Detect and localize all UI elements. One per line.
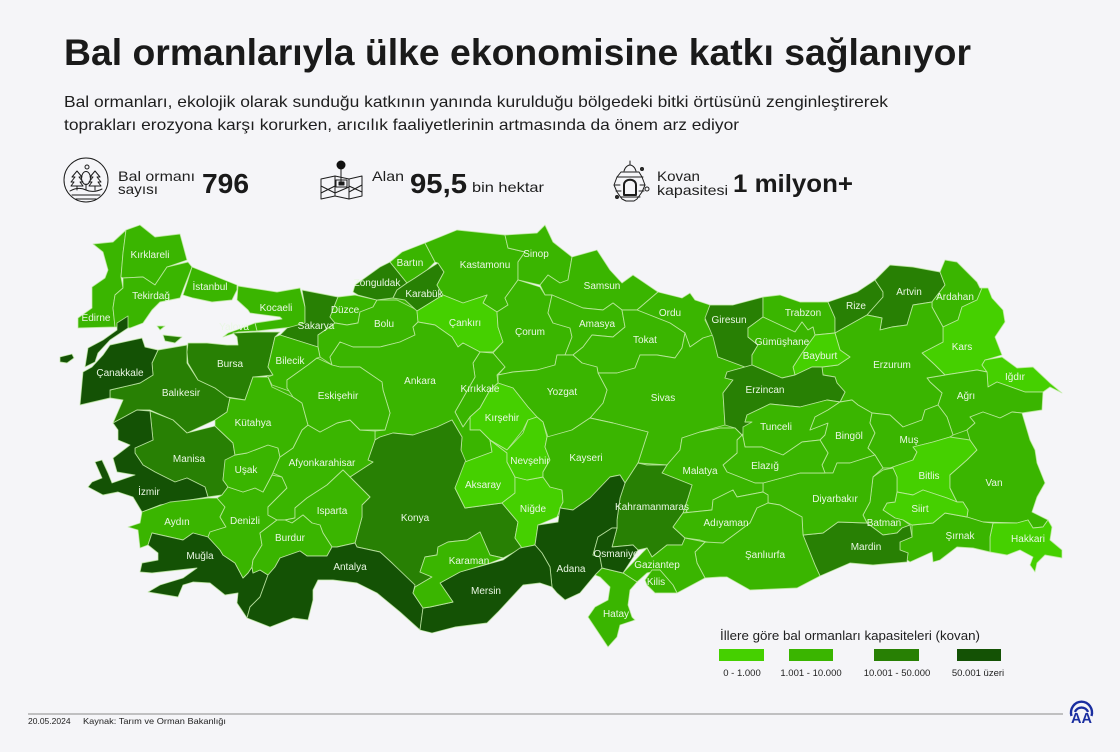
legend: 50.001 üzeri: [952, 668, 1004, 679]
province name labels: Erzurum: [873, 360, 911, 371]
province name labels: Tekirdağ: [132, 291, 170, 302]
subtitle text: [64, 94, 889, 134]
stat: hive capacity: 1 milyon+: [733, 170, 853, 198]
province name labels: Amasya: [579, 319, 615, 330]
subtitle text: Bal ormanları, ekolojik olarak sunduğu katkının yanında kurulduğu bölgedeki bitki örtüsünü zenginleştirerek: [64, 94, 889, 111]
province name labels: Diyarbakır: [812, 494, 858, 505]
province name labels: Edirne: [82, 313, 111, 324]
province shapes: [60, 225, 1062, 647]
stat: hive capacity: [614, 161, 853, 201]
province name labels: Şanlıurfa: [745, 550, 785, 561]
province name labels: Denizli: [230, 516, 260, 527]
province name labels: Karaman: [449, 556, 489, 567]
province name labels: Sinop: [523, 249, 549, 260]
province name labels: Mersin: [471, 586, 501, 597]
province name labels: Adana: [557, 564, 586, 575]
province name labels: Niğde: [520, 504, 546, 515]
province name labels: Bitlis: [918, 471, 940, 482]
province name labels: Düzce: [331, 305, 360, 316]
province name labels: Kırklareli: [131, 250, 169, 261]
province name labels: Bingöl: [835, 431, 863, 442]
province name labels: Tokat: [633, 335, 657, 346]
stat: hive capacity: Kovan: [657, 168, 700, 184]
province name labels: Samsun: [584, 281, 620, 292]
province name labels: Ankara: [404, 376, 436, 387]
province name labels: Iğdır: [1005, 372, 1026, 383]
province name labels: Kırıkkale: [461, 384, 500, 395]
legend: [719, 629, 1004, 679]
province name labels: Hatay: [603, 609, 629, 620]
province name labels: Elazığ: [751, 461, 779, 472]
province name labels: Karabük: [405, 289, 444, 300]
province name labels: Yalova: [219, 322, 249, 333]
province name labels: Giresun: [711, 315, 747, 326]
province name labels: Kayseri: [569, 453, 603, 464]
stat: area: [321, 160, 544, 199]
stat: forest count: [64, 158, 249, 202]
province name labels: Bartın: [397, 258, 423, 269]
province name labels: Afyonkarahisar: [289, 458, 356, 469]
province name labels: Kilis: [647, 577, 665, 588]
province name labels: Manisa: [173, 454, 206, 465]
subtitle text: toprakları erozyona karşı korurken, arıcılık faaliyetlerinin artmasında da önem arz ediyor: [64, 117, 740, 134]
legend: 0 - 1.000: [723, 668, 761, 679]
province name labels: Tunceli: [760, 422, 792, 433]
province name labels: Hakkari: [1011, 534, 1045, 545]
province name labels: Gaziantep: [634, 560, 680, 571]
province name labels: Aydın: [164, 517, 190, 528]
province name labels: Sivas: [651, 393, 675, 404]
province name labels: Konya: [401, 513, 430, 524]
province name labels: İstanbul: [192, 280, 228, 293]
icon: map with pin: [321, 160, 362, 199]
footer source line: 20.05.2024: [28, 716, 71, 726]
legend: 10.001 - 50.000: [864, 668, 930, 679]
province name labels: Bayburt: [803, 351, 837, 362]
icon: forest: [64, 158, 108, 202]
legend: İllere göre bal ormanları kapasiteleri (kovan): [720, 629, 980, 643]
province name labels: Ağrı: [957, 391, 975, 402]
province name labels: Yozgat: [547, 387, 577, 398]
province name labels: Malatya: [682, 466, 718, 477]
province name labels: Muş: [900, 435, 918, 446]
province name labels: Isparta: [317, 506, 348, 517]
province name labels: Mardin: [851, 542, 881, 553]
province name labels: Şırnak: [946, 531, 975, 542]
province name labels: Bilecik: [276, 356, 305, 367]
province name labels: Kütahya: [235, 418, 272, 429]
province name labels: Kastamonu: [460, 260, 510, 271]
province name labels: Çorum: [515, 327, 545, 338]
province name labels: Muğla: [186, 551, 214, 562]
stat: hive capacity: kapasitesi: [657, 182, 728, 198]
choropleth map of Turkey: [60, 225, 1062, 647]
province name labels: Van: [985, 478, 1003, 489]
stat: forest count: sayısı: [118, 181, 158, 197]
province name labels: Çanakkale: [96, 368, 144, 379]
province name labels: Osmaniye: [593, 549, 639, 560]
icon: beehive: [614, 161, 649, 201]
province name labels: Batman: [867, 518, 901, 529]
province name labels: Bursa: [217, 359, 243, 370]
stat: area: Alan: [372, 168, 404, 184]
province name labels: Aksaray: [465, 480, 501, 491]
province name labels: Adıyaman: [703, 518, 749, 529]
province name labels: Balıkesir: [162, 388, 201, 399]
legend: 1.001 - 10.000: [780, 668, 842, 679]
province name labels: Kahramanmaraş: [615, 502, 689, 513]
province name labels: Siirt: [911, 504, 929, 515]
province name labels: Ordu: [659, 308, 681, 319]
province name labels: Nevşehir: [510, 456, 550, 467]
province name labels: Trabzon: [785, 308, 821, 319]
icon: AA logo: [1071, 702, 1092, 727]
province name labels: Zonguldak: [354, 278, 401, 289]
icon: AA logo: AA: [1071, 710, 1092, 727]
province name labels: Çankırı: [449, 318, 481, 329]
province name labels: İzmir: [138, 485, 160, 498]
stat: forest count: Bal ormanı: [118, 168, 195, 184]
province name labels: Artvin: [896, 287, 922, 298]
province name labels: [82, 249, 1045, 620]
province name labels: Antalya: [333, 562, 367, 573]
province name labels: Rize: [846, 301, 866, 312]
title: Bal ormanlarıyla ülke ekonomisine katkı sağlanıyor: [64, 32, 971, 73]
stat: forest count: 796: [202, 168, 249, 199]
province name labels: Uşak: [235, 465, 258, 476]
province name labels: Ardahan: [936, 292, 974, 303]
stat: area: 95,5: [410, 168, 467, 199]
province name labels: Eskişehir: [318, 391, 359, 402]
footer source line: [28, 714, 1063, 726]
province name labels: Bolu: [374, 319, 394, 330]
province name labels: Kırşehir: [485, 413, 520, 424]
province name labels: Kars: [952, 342, 972, 353]
province name labels: Erzincan: [746, 385, 784, 396]
stat: area: bin hektar: [472, 179, 544, 195]
footer source line: Kaynak: Tarım ve Orman Bakanlığı: [83, 716, 226, 726]
province name labels: Sakarya: [298, 321, 335, 332]
province name labels: Kocaeli: [260, 303, 292, 314]
province name labels: Gümüşhane: [755, 337, 810, 348]
province name labels: Burdur: [275, 533, 306, 544]
